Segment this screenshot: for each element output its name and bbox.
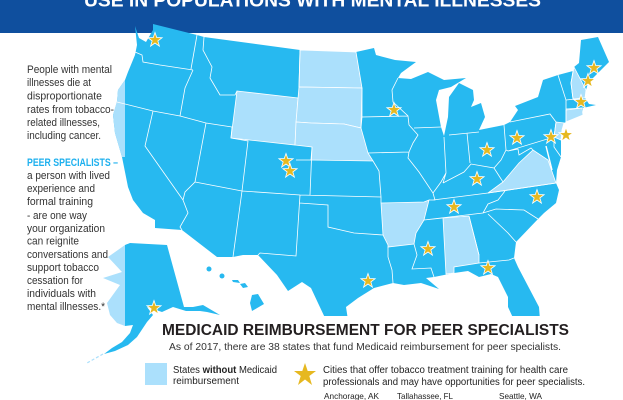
swatch bbox=[145, 363, 167, 385]
subheading: As of 2017, there are 38 states that fund Medicaid reimbursement for peer specialists. bbox=[169, 342, 561, 353]
left text block: - are one way bbox=[27, 210, 87, 222]
left text block: PEER SPECIALISTS – bbox=[27, 157, 118, 169]
left text block: mental illnesses.* bbox=[27, 301, 106, 313]
state: Connecticut and Rhode Island bbox=[566, 108, 583, 122]
state: Virginia bbox=[488, 150, 556, 193]
state: New Jersey bbox=[554, 122, 564, 140]
state: Alabama bbox=[443, 216, 479, 274]
star: Seattle bbox=[148, 32, 162, 46]
state borders bbox=[117, 35, 585, 283]
left text block: People with mental bbox=[27, 64, 112, 76]
white panel behind heading bbox=[155, 316, 623, 400]
left text block: individuals with bbox=[27, 288, 96, 300]
star: Denver 1 bbox=[279, 154, 293, 167]
left text block: your organization bbox=[27, 223, 105, 235]
star: Philadelphia bbox=[544, 130, 558, 143]
star: Maine north bbox=[587, 60, 601, 74]
state: North Dakota bbox=[299, 50, 362, 88]
state: Wyoming bbox=[231, 91, 298, 145]
star: Kentucky bbox=[470, 172, 484, 185]
star: Anchorage bbox=[147, 300, 161, 314]
banner bbox=[0, 0, 623, 33]
state: Nebraska bbox=[295, 122, 373, 161]
island: Maui bbox=[240, 283, 248, 288]
Aleutian islands bbox=[87, 354, 103, 363]
legend: states without reimbursement: reimbursement bbox=[173, 376, 239, 387]
left text block: a person with lived bbox=[27, 170, 110, 182]
legend text: States without Medicaid bbox=[173, 365, 277, 376]
left text block: cessation for bbox=[27, 275, 83, 287]
left text block: conversations and bbox=[27, 249, 108, 261]
star: New Jersey bbox=[559, 128, 573, 141]
legend: states without reimbursement bbox=[145, 363, 277, 387]
island: Big Island bbox=[250, 294, 264, 311]
left text block: experience and bbox=[27, 183, 95, 195]
city list bbox=[324, 391, 542, 400]
left text block: can reignite bbox=[27, 236, 79, 248]
state: New Hampshire bbox=[571, 67, 586, 99]
star: Minneapolis bbox=[387, 102, 401, 116]
legend: cities: professionals and may have opportunities for peer specialists. bbox=[323, 377, 585, 388]
left text block: related illnesses, bbox=[27, 117, 100, 129]
star: Mississippi bbox=[421, 242, 435, 255]
left text block: illnesses die at bbox=[27, 77, 91, 89]
left text block: rates from tobacco- bbox=[27, 104, 114, 116]
legend star bbox=[294, 363, 316, 385]
island: Molokai bbox=[232, 280, 240, 283]
Chesapeake Bay bbox=[546, 146, 552, 170]
star: Tallahassee bbox=[481, 260, 495, 274]
state: South Dakota bbox=[296, 87, 362, 128]
star: Tennessee bbox=[447, 200, 461, 213]
left text block: including cancer. bbox=[27, 130, 101, 142]
star: Pennsylvania bbox=[510, 130, 524, 144]
legend: cities bbox=[294, 363, 585, 388]
Alaska west bbox=[103, 245, 125, 326]
left text block: support tobacco bbox=[27, 262, 99, 274]
coastal light strip bbox=[113, 80, 125, 157]
star: Maine south bbox=[581, 74, 595, 87]
star: Houston bbox=[361, 274, 375, 287]
legend cities text: Cities that offer tobacco treatment training for health care bbox=[323, 365, 568, 376]
Alaska main bbox=[104, 243, 220, 354]
left text block: disproportionate bbox=[27, 90, 102, 102]
island: Oahu bbox=[220, 274, 224, 278]
Alaska bbox=[87, 243, 220, 363]
star: Ohio bbox=[480, 142, 494, 156]
star: Denver 2 bbox=[283, 164, 297, 177]
left text block bbox=[27, 64, 118, 313]
star: North Carolina bbox=[530, 190, 544, 203]
Hawaii bbox=[206, 266, 264, 311]
star: Boston bbox=[574, 94, 588, 108]
island: Kauai bbox=[206, 266, 212, 272]
contiguous states silhouette bbox=[113, 24, 609, 320]
state: Arkansas bbox=[381, 200, 429, 247]
heading: Medicaid reimbursement: MEDICAID REIMBURSEMENT FOR PEER SPECIALISTS bbox=[162, 322, 569, 339]
map of the United States bbox=[113, 24, 609, 320]
left text block: formal training bbox=[27, 196, 93, 208]
